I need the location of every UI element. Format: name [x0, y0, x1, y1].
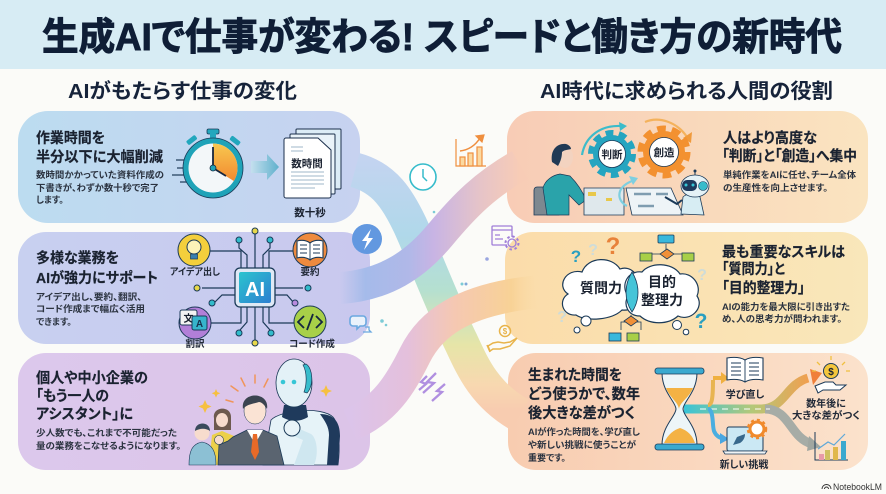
panel: versatile AI support: [18, 228, 370, 350]
icon: gear creation: 創造: [654, 146, 675, 159]
question marks: ?: [606, 233, 620, 260]
question marks: ?: [697, 267, 707, 284]
icon: chat bubbles: [350, 316, 371, 332]
panel 3 body: 量の業務をこなせるようになります。: [36, 440, 181, 451]
panel 2 body: [36, 291, 145, 327]
right panel 2 content: [557, 233, 850, 341]
icon: translation: [179, 307, 211, 339]
panel: personal assistant: [18, 353, 370, 470]
question marks: ?: [588, 242, 598, 259]
panel 1 body: 数時間かかっていた資料作成の: [36, 169, 164, 180]
header band: [0, 0, 886, 69]
question marks: ?: [571, 247, 581, 266]
panel: human judgement: [507, 111, 868, 223]
panel 1 body: 下書きが、わずか数十秒で完了: [36, 182, 159, 193]
panel 3 heading: 「もう一人の: [36, 388, 109, 405]
panel 3 heading: アシスタント」に: [36, 406, 133, 423]
panel 3 heading: [36, 369, 148, 423]
right panel 2 body: [722, 301, 850, 324]
label: new challenge: 新しい挑戦: [720, 458, 768, 471]
label: big difference: [792, 397, 860, 422]
right panel 3 heading: 後大きな差がつく: [528, 404, 635, 422]
panel 1 body: [36, 169, 164, 205]
label: code: コード作成: [289, 338, 335, 350]
panel 2 body: できます。: [36, 317, 72, 327]
flowchart bottom: [609, 315, 641, 341]
illustration: people with robot: [189, 359, 340, 465]
right panel 3 heading: どう使うかで、数年: [528, 385, 640, 403]
icon: coin and hand: [812, 356, 850, 393]
icon: gear judgement: 判断: [602, 148, 623, 161]
right panel 3 content: [528, 356, 860, 471]
panel 2 heading: 多様な業務を: [36, 249, 119, 267]
panel 1 heading: 半分以下に大幅削減: [36, 148, 163, 166]
icon: gear creation: [641, 129, 687, 175]
icon: rising chart: [815, 432, 848, 460]
label: seconds: 数十秒: [294, 206, 326, 219]
right panel 3 heading: [528, 367, 640, 422]
ribbon: blue to peach: [355, 170, 520, 415]
right panel 1 heading: 「判断」と「創造」へ集中: [722, 147, 857, 165]
cloud labels: 質問力: [580, 280, 622, 296]
right panel 1 body: 単純作業をAIに任せ、チーム全体: [723, 169, 856, 180]
road branches: [684, 369, 822, 451]
icon: idea bulb: [178, 234, 210, 266]
illustration: thought clouds: 目的: [648, 274, 676, 290]
icon: coin and hand: $: [828, 367, 834, 378]
panel 1 heading: 作業時間を: [36, 129, 105, 147]
panel 2 heading: AIが強力にサポート: [36, 269, 158, 287]
icon: clock: [410, 164, 436, 190]
icon: book: [727, 357, 763, 382]
panel 2 heading: [36, 249, 158, 287]
question marks: [557, 233, 707, 333]
right panel 2 heading: [722, 244, 846, 297]
right panel 2 body: め、人の思考力が問われます。: [722, 313, 842, 324]
icon: zigzag flow: [419, 373, 445, 401]
panel: use of freed time: [508, 353, 868, 470]
panel 3 body: [36, 427, 181, 451]
right column heading: AI時代に求められる人間の役割: [540, 80, 833, 103]
decorative dots: [380, 211, 489, 326]
label: summary: 要約: [300, 266, 320, 278]
sparkles and rays: [198, 375, 332, 413]
brand mark: NotebookLM: [833, 482, 882, 492]
icon: translation: A: [196, 319, 203, 330]
right panel 3 body: [528, 426, 641, 463]
right panel 3 heading: 生まれた時間を: [528, 367, 622, 384]
right panel 1 content: [534, 120, 857, 215]
right panel 2 heading: 最も重要なスキルは: [722, 244, 846, 261]
right panel 2 body: AIの能力を最大限に引き出すた: [722, 301, 850, 312]
flowchart top: [640, 235, 694, 261]
label: translation: 割訳: [185, 338, 205, 350]
panel: time reduction: [18, 111, 360, 223]
right panel 3 body: AIが作った時間を、学び直し: [528, 426, 641, 437]
icon: hourglass: [655, 368, 704, 450]
icon: document stack: [284, 129, 341, 198]
panel 3 body: 少人数でも、これまで不可能だった: [36, 427, 177, 438]
icon: lightning badge: [352, 224, 382, 254]
label: relearn: 学び直し: [726, 388, 765, 401]
icon: translation: 文: [184, 312, 194, 325]
panel 1 body: します。: [36, 195, 64, 205]
icon: stopwatch: [172, 129, 243, 198]
label: idea: アイデア出し: [170, 266, 220, 278]
right panel 1 heading: [722, 129, 857, 165]
illustration: robot at panel: [626, 170, 709, 215]
question marks: ?: [557, 309, 567, 326]
question marks: ?: [695, 310, 707, 333]
label: big difference: 数年後に: [806, 397, 846, 410]
icon: gear judgement: [592, 134, 632, 174]
icon: growth chart: [456, 135, 486, 166]
ribbon: purple to yellow: [350, 292, 535, 425]
icon: open book: [293, 233, 327, 267]
icon: laptop: [723, 420, 767, 454]
right panel 2 heading: 「目的整理力」: [722, 279, 805, 297]
illustration: thought clouds: 整理力: [641, 292, 683, 308]
icon: window with gear: [492, 226, 518, 250]
panel 2 body: アイデア出し、要約、翻訳、: [36, 291, 142, 302]
illustration: person at console: [534, 144, 624, 215]
diagram: AI chip with tools: [194, 228, 311, 346]
title: 生成AIで仕事が変わる! スピードと働き方の新時代: [42, 17, 842, 59]
right panel 1 body: [723, 169, 856, 193]
label: big difference: 大きな差がつく: [792, 409, 860, 422]
right panel 1 body: の生産性を向上させます。: [723, 182, 828, 193]
icon: coin in hand: [487, 326, 517, 352]
icon: coin in hand: $: [503, 327, 508, 336]
arrow: [251, 154, 279, 180]
panel 3 heading: 個人や中小企業の: [36, 369, 148, 387]
illustration: thought clouds: [562, 260, 699, 335]
panel 2 body: コード作成まで幅広く活用: [36, 303, 145, 314]
right panel 3 body: 重要です。: [528, 452, 566, 463]
icon: document stack: 数時間: [291, 157, 323, 170]
chip label: AI: [245, 279, 265, 301]
ribbon: periwinkle to peach: [340, 165, 520, 288]
icon: code: [294, 306, 326, 338]
right panel 2 heading: 「質問力」と: [722, 261, 785, 278]
panel: key skills: [505, 232, 868, 344]
arrows over gears: [582, 120, 692, 206]
right panel 1 heading: 人はより高度な: [723, 129, 817, 147]
right panel 3 body: や新しい挑戦に使うことが: [528, 439, 636, 450]
panel 1 heading: [36, 129, 163, 166]
left column heading: AIがもたらす仕事の変化: [68, 79, 298, 103]
